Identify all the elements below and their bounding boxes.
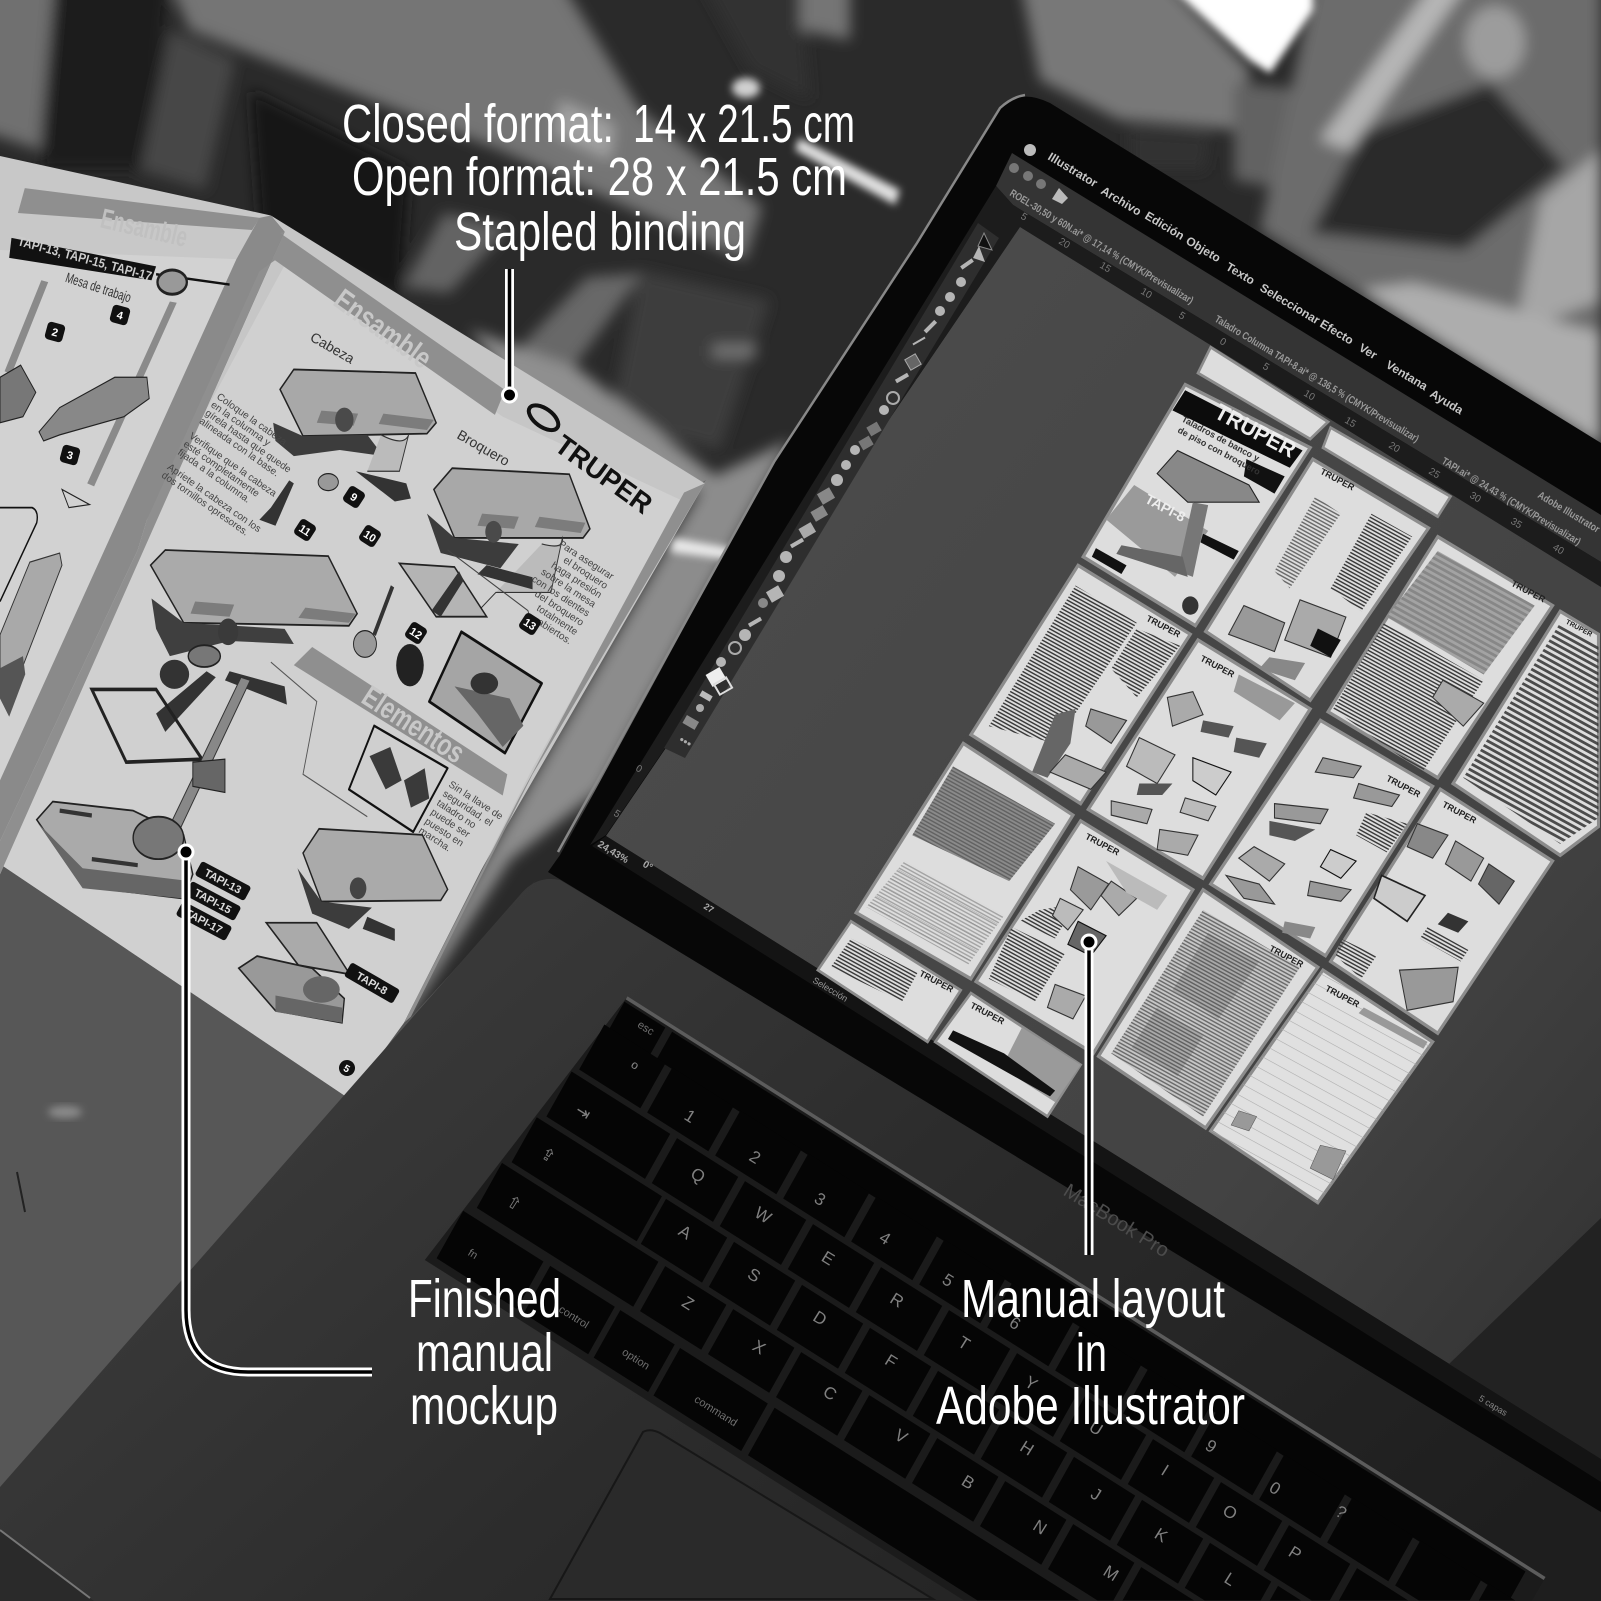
keyboard legends: R bbox=[887, 1289, 907, 1312]
keyboard legends: O bbox=[1219, 1501, 1241, 1524]
document tabs: Taladro Columna TAPI-8.ai* @ 136,5 % (CMYK/Previsualizar) bbox=[1212, 313, 1421, 445]
artboard labels: de piso con broquero bbox=[1176, 425, 1262, 477]
manual text: cabeza instructions: gírela hasta que quede bbox=[203, 408, 293, 476]
caption: finished manual mockup: Finished bbox=[408, 1269, 561, 1329]
artboard strips top bbox=[1198, 347, 1328, 439]
menu bar: Edición bbox=[1142, 209, 1187, 243]
rulers: 35 bbox=[1508, 516, 1524, 532]
manual text: broquero instructions bbox=[511, 537, 616, 647]
inset: safety switch bbox=[349, 726, 448, 832]
caption: format specifications: Open format: 28 x 21.5 cm bbox=[352, 147, 847, 207]
lid body bbox=[548, 97, 1601, 1512]
status bar text: Selección bbox=[811, 975, 850, 1004]
artboard: drill charts bbox=[856, 743, 1073, 979]
artboard: dense text bbox=[1453, 611, 1598, 855]
rulers: 5 bbox=[1018, 211, 1029, 224]
rulers: 5 bbox=[1176, 310, 1187, 323]
artboard labels bbox=[918, 398, 1593, 1027]
number tags: 11 bbox=[296, 523, 313, 539]
keyboard legends: P bbox=[1285, 1542, 1305, 1564]
label: right Ensamble: Ensamble bbox=[328, 283, 438, 376]
keyboard legends: fn bbox=[466, 1247, 480, 1262]
inset: chuck detail bbox=[429, 632, 542, 753]
caption: manual layout in Adobe Illustrator: Adobe Illustrator bbox=[936, 1376, 1245, 1436]
rulers: 0 bbox=[633, 763, 644, 776]
keyboard legends: 9 bbox=[1202, 1436, 1220, 1457]
model pills: TAPI-15 bbox=[192, 887, 233, 917]
manual text: cabeza instructions: Coloque la cabeza bbox=[214, 391, 289, 448]
model pills: TAPI-8 bbox=[354, 970, 389, 998]
keyboard legends bbox=[466, 1019, 1350, 1590]
artboard: cover bbox=[1083, 385, 1310, 626]
manual text: cabeza instructions: Apriete la cabeza con los bbox=[165, 462, 263, 535]
menu bar: Texto bbox=[1223, 260, 1257, 288]
number tags: 5 bbox=[341, 1063, 352, 1076]
menu bar: Objeto bbox=[1183, 234, 1223, 265]
manual text: broquero instructions: haga presión bbox=[549, 560, 603, 601]
manual text: cabeza instructions: esté completamente bbox=[181, 439, 261, 500]
keyboard legends: command bbox=[692, 1394, 739, 1429]
manual text: cabeza instructions: en la columna y bbox=[209, 400, 272, 449]
menu bar: Ayuda bbox=[1427, 387, 1466, 417]
keyboard legends: option bbox=[620, 1346, 651, 1372]
leader: finished mockup bbox=[178, 844, 372, 1372]
number tags: 2 bbox=[50, 326, 59, 340]
rulers: 10 bbox=[1301, 388, 1317, 404]
keyboard legends: ? bbox=[1332, 1502, 1350, 1523]
window controls and home icon bbox=[1009, 163, 1068, 204]
keyboard legends: A bbox=[675, 1221, 695, 1244]
manual text: cabeza instructions: dos tornillos opresores. bbox=[159, 470, 250, 538]
keyboard legends: N bbox=[1030, 1516, 1050, 1539]
caption: format specifications bbox=[342, 94, 855, 262]
keyboard legends: 1 bbox=[681, 1106, 699, 1127]
artboard labels: TRUPER bbox=[1211, 398, 1301, 463]
status bar bbox=[592, 836, 1601, 1482]
artboard labels: TRUPER bbox=[1385, 773, 1423, 800]
label: Broquero: Broquero bbox=[455, 426, 513, 469]
key row: ZXCV bbox=[477, 1163, 1194, 1600]
caption: format specifications: Stapled binding bbox=[454, 202, 746, 262]
artboard labels: TRUPER bbox=[918, 968, 956, 995]
keyboard legends: 2 bbox=[746, 1147, 764, 1168]
artboard: safety with person bbox=[971, 565, 1190, 804]
drill: lower bbox=[239, 829, 448, 1023]
key row: ASDF bbox=[512, 1117, 1301, 1600]
manual text: safety switch bbox=[416, 779, 505, 869]
manual text: safety switch: Sin la llave de bbox=[446, 779, 505, 823]
manual text: safety switch: seguridad, el bbox=[440, 789, 494, 829]
caption: manual layout in Adobe Illustrator: Manual layout bbox=[961, 1269, 1225, 1329]
status bar text: 0° bbox=[640, 859, 654, 873]
caption: format specifications: Closed format: bbox=[342, 94, 614, 154]
label: left Ensamble: Ensamble bbox=[98, 203, 190, 253]
status bar text bbox=[595, 839, 1510, 1418]
keyboard legends: Y bbox=[1021, 1372, 1041, 1394]
model pills: TAPI-13 bbox=[202, 867, 243, 897]
status bar text: 27 bbox=[702, 901, 716, 915]
left page bbox=[0, 156, 285, 874]
number tags: 12 bbox=[407, 625, 424, 642]
number tags: 13 bbox=[521, 616, 538, 633]
number tags bbox=[44, 304, 542, 1079]
document tabs bbox=[1007, 187, 1601, 548]
label: mesa de trabajo: Mesa de trabajo bbox=[64, 269, 133, 305]
keyboard legends: 3 bbox=[811, 1189, 829, 1210]
keyboard legends: X bbox=[749, 1336, 769, 1358]
window title strip bbox=[996, 153, 1601, 562]
keyboard legends: V bbox=[891, 1425, 911, 1448]
logo: Truper: TRUPER bbox=[549, 429, 658, 520]
manual text: broquero instructions: sobre la mesa bbox=[539, 567, 598, 610]
manual page edge stack bbox=[342, 480, 706, 1095]
rulers: 10 bbox=[1138, 286, 1154, 302]
artboard: notes bbox=[1211, 970, 1433, 1203]
logo: Truper bbox=[515, 400, 660, 520]
printed manual mockup bbox=[0, 156, 706, 1099]
rulers: 20 bbox=[1386, 440, 1402, 456]
artboard: bottom left bbox=[818, 921, 961, 1042]
menu bar: Seleccionar bbox=[1257, 281, 1323, 327]
leader: format specifications bbox=[501, 269, 518, 404]
menu bar: Efecto bbox=[1317, 317, 1356, 347]
keyboard legends: º bbox=[625, 1059, 641, 1078]
artboard labels: TRUPER bbox=[1319, 466, 1357, 493]
tools panel: ••• bbox=[676, 732, 694, 751]
menu bar: Illustrator bbox=[1045, 150, 1100, 190]
key row: QWERTY bbox=[546, 1072, 1408, 1600]
artboard labels: TRUPER bbox=[969, 1000, 1007, 1027]
right page bbox=[0, 215, 705, 1099]
keyboard legends: C bbox=[820, 1382, 840, 1405]
label: left pill text: TAPI-13, TAPI-15, TAPI-17 bbox=[16, 233, 153, 284]
keyboard legends: S bbox=[744, 1264, 764, 1286]
manual text: broquero instructions: totalmente bbox=[534, 603, 580, 638]
lid silver edge bbox=[558, 95, 1025, 852]
artboard labels: TRUPER bbox=[1084, 831, 1122, 858]
keyboard legends: L bbox=[1221, 1569, 1239, 1590]
keyboard legends: F bbox=[881, 1351, 900, 1372]
keyboard legends: H bbox=[1017, 1437, 1037, 1460]
manual text: broquero instructions: con los dientes bbox=[529, 574, 591, 619]
manual text: safety switch: puede ser bbox=[428, 807, 472, 841]
keyboard legends: 6 bbox=[1006, 1313, 1024, 1334]
artboard: warnings bbox=[1206, 459, 1429, 700]
keyboard legends: ⇧ bbox=[503, 1192, 525, 1215]
rulers: 5 bbox=[611, 808, 622, 821]
keyboard legends: 4 bbox=[876, 1228, 894, 1249]
model pills bbox=[176, 861, 400, 1004]
caption: manual layout in Adobe Illustrator: in bbox=[1076, 1323, 1107, 1383]
keyboard legends: ⇥ bbox=[572, 1101, 594, 1124]
artboard labels: TRUPER bbox=[1564, 619, 1593, 639]
table surface bbox=[0, 860, 536, 1500]
rulers: 0 bbox=[1217, 336, 1228, 349]
MacBook Pro wordmark: MacBook Pro bbox=[1059, 1180, 1173, 1262]
keyboard legends: E bbox=[818, 1247, 838, 1269]
number tags: 10 bbox=[361, 528, 378, 545]
manual text: cabeza instructions: alineada con la base. bbox=[197, 416, 281, 479]
caption: finished manual mockup: manual bbox=[416, 1323, 553, 1383]
apple logo bbox=[1024, 144, 1036, 156]
key row: modifiers and space bbox=[437, 1211, 1079, 1600]
caption: manual layout in Adobe Illustrator bbox=[936, 1269, 1245, 1436]
menu bar bbox=[1045, 150, 1466, 417]
menu bar: Archivo bbox=[1098, 184, 1144, 219]
artboard: warranty form bbox=[935, 993, 1081, 1117]
keyboard legends: Z bbox=[678, 1293, 697, 1314]
keyboard legends: B bbox=[958, 1471, 978, 1493]
keyboard legends: 0 bbox=[1266, 1478, 1284, 1499]
artboard labels: TRUPER bbox=[1441, 799, 1479, 826]
manual text: safety switch: puesto en bbox=[422, 816, 465, 849]
manual text: broquero instructions: Para asegurar bbox=[556, 539, 616, 583]
keyboard legends: ⇪ bbox=[537, 1144, 559, 1167]
manual text: safety switch: marcha. bbox=[416, 825, 453, 854]
manual text: broquero instructions: del broquero bbox=[532, 589, 586, 629]
artboard labels: TRUPER bbox=[1145, 613, 1183, 640]
rulers bbox=[611, 211, 1566, 821]
laptop deck bbox=[0, 879, 1601, 1601]
rulers: 30 bbox=[1467, 490, 1483, 506]
artboard labels: TRUPER bbox=[1268, 943, 1306, 970]
rulers: 15 bbox=[1342, 415, 1358, 431]
caption: finished manual mockup: mockup bbox=[410, 1376, 558, 1436]
keyboard legends: T bbox=[954, 1333, 973, 1354]
drill: cabeza bbox=[259, 369, 436, 526]
keyboard legends: esc bbox=[635, 1019, 656, 1038]
rulers: 20 bbox=[1056, 236, 1072, 252]
artboard: assembly 1 bbox=[1088, 640, 1310, 878]
keyboard legends: W bbox=[751, 1203, 775, 1228]
keyboard legends: M bbox=[1100, 1562, 1122, 1585]
trackpad bbox=[550, 1430, 933, 1599]
laptop lid and display bbox=[548, 95, 1601, 1512]
manual text: broquero instructions: el broquero bbox=[561, 555, 610, 592]
artboard labels: Taladros de banco y bbox=[1180, 414, 1261, 463]
key row: touch bar bbox=[609, 1002, 1526, 1599]
menu bar: Ver bbox=[1356, 341, 1380, 362]
manual text: cabeza instructions: Verifique que la cabeza bbox=[187, 431, 279, 500]
label: Cabeza: Cabeza bbox=[308, 329, 358, 367]
keyboard legends: control bbox=[556, 1304, 591, 1331]
caption: format specifications: 14 x 21.5 cm bbox=[633, 94, 855, 154]
Elementos band bbox=[294, 647, 507, 795]
number tags: 4 bbox=[115, 309, 125, 323]
model pills: TAPI-17 bbox=[183, 907, 224, 937]
keyboard legends: D bbox=[810, 1307, 830, 1330]
number tags: 3 bbox=[65, 449, 74, 463]
rulers: 40 bbox=[1550, 542, 1566, 558]
artboard labels: TRUPER bbox=[1199, 653, 1237, 680]
status bar text: 5 capas bbox=[1477, 1393, 1510, 1418]
keyboard legends: J bbox=[1087, 1484, 1105, 1505]
rulers: 15 bbox=[1097, 260, 1113, 276]
caption: finished manual mockup bbox=[408, 1269, 561, 1436]
artboard: usage bbox=[976, 821, 1193, 1053]
fill swatch bbox=[706, 667, 726, 687]
drill: broquero bbox=[354, 468, 590, 686]
artboard: assembly 2 bbox=[1211, 720, 1433, 956]
keyboard legends: K bbox=[1151, 1524, 1171, 1547]
artboards in Illustrator bbox=[818, 347, 1598, 1203]
tools panel bbox=[664, 223, 999, 758]
document tabs: ROEL-30,50 y 60N.ai* @ 17,14 % (CMYK/Previsualizar) bbox=[1007, 187, 1195, 307]
canvas bbox=[606, 227, 1601, 1459]
key row: numbers bbox=[579, 1025, 1515, 1600]
manual text: cabeza instructions bbox=[159, 391, 312, 543]
artboard labels: TRUPER bbox=[1324, 983, 1362, 1010]
menu bar: Ventana bbox=[1383, 358, 1430, 393]
keyboard legends: 5 bbox=[939, 1270, 957, 1291]
deck silver corner bbox=[0, 1530, 90, 1598]
keyboard legends: U bbox=[1086, 1417, 1106, 1440]
drill: elementos large bbox=[37, 550, 367, 899]
ruler strip bbox=[590, 186, 1601, 845]
keyboard legends: I bbox=[1158, 1461, 1172, 1480]
rulers: 25 bbox=[1426, 466, 1442, 482]
artboard labels: TRUPER bbox=[1510, 578, 1548, 605]
label: Elementos: Elementos bbox=[356, 680, 470, 770]
right panel bbox=[1449, 1218, 1601, 1459]
keyboard well bbox=[425, 998, 1545, 1600]
artboard: specs table bbox=[1328, 537, 1553, 778]
manual text: safety switch: taladro no bbox=[434, 798, 478, 831]
number tags: 9 bbox=[348, 491, 359, 505]
artboard: accessories bbox=[1331, 789, 1553, 1033]
artboard: warranty text bbox=[1098, 890, 1318, 1128]
artboard labels: TAPI-8 bbox=[1143, 491, 1189, 525]
keyboard legends: Q bbox=[687, 1164, 709, 1187]
manual text: cabeza instructions: fijada a la columna. bbox=[175, 447, 252, 506]
leader: Illustrator layout bbox=[1080, 934, 1098, 1255]
manual text: broquero instructions: abiertos. bbox=[535, 617, 573, 647]
status bar text: 24,43% bbox=[595, 839, 630, 866]
rulers: 5 bbox=[1260, 361, 1271, 374]
